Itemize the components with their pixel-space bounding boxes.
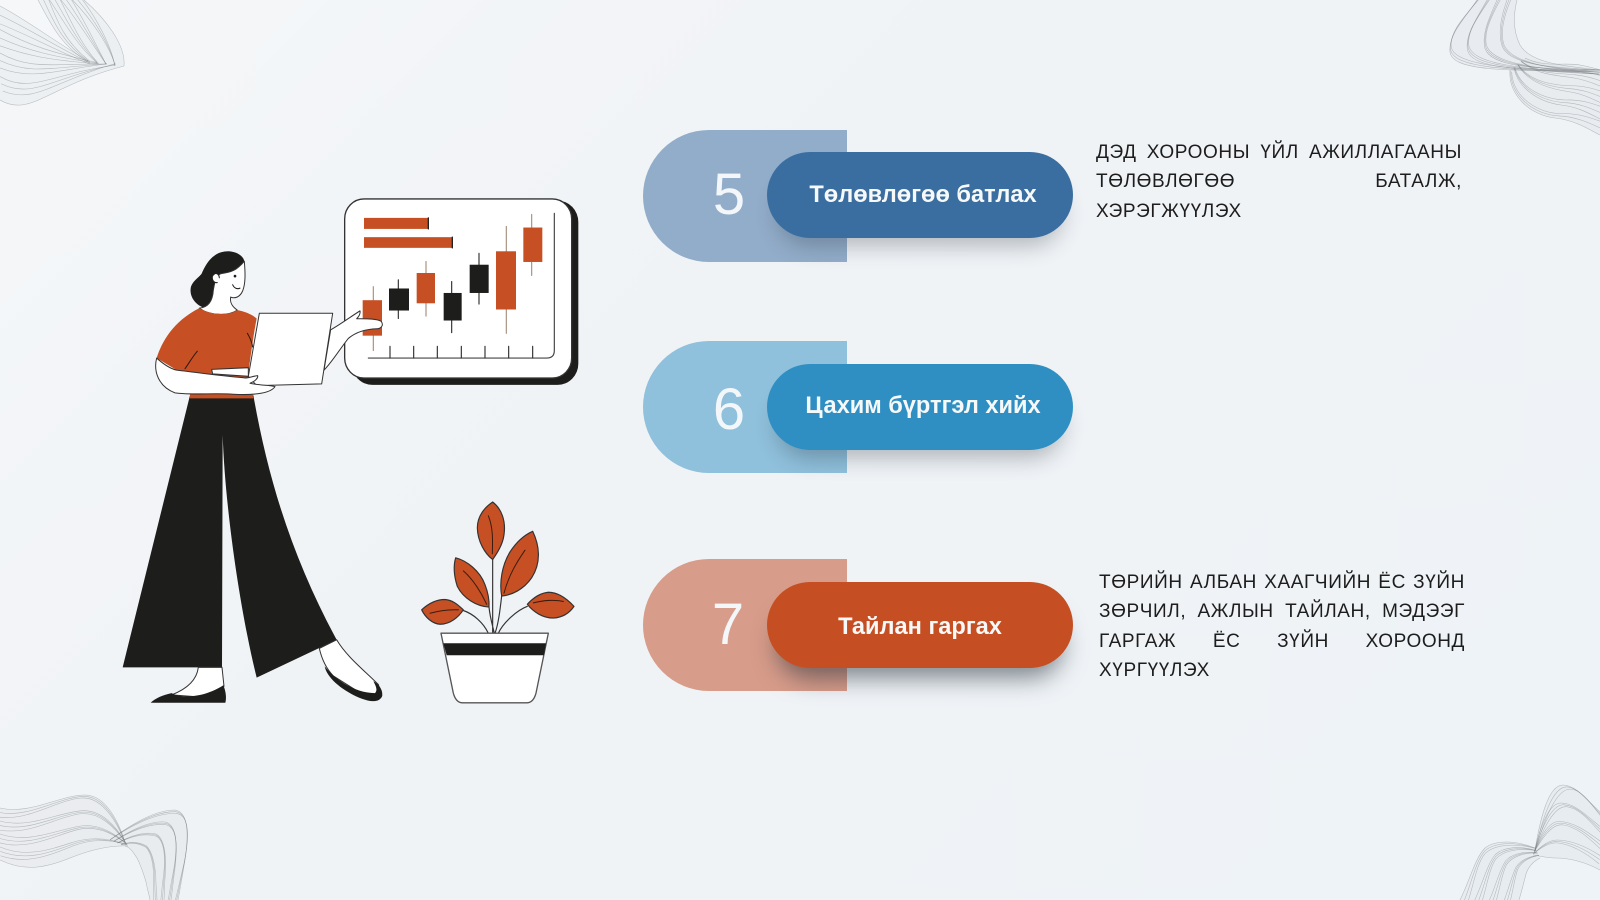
decorative wave: top left [0,0,124,106]
step 6 number tab [643,341,847,473]
step 7 number tab [643,559,847,691]
text: step 7 description: ТӨРИЙН АЛБАН ХААГЧИЙН ЁС ЗҮЙН [1099,572,1465,593]
text: step 7 description: ХҮРГҮҮЛЭХ [1099,660,1210,681]
decorative wave: top right [1450,0,1600,136]
step 5 number: 5 [713,162,745,227]
step 7 label pill: Тайлан гаргах [838,614,1002,640]
step 6 label pill: Цахим бүртгэл хийх [805,393,1041,419]
text: step 7 description: ГАРГАЖ ЁС ЗҮЙН ХОРООНД [1099,631,1465,652]
decorative wave: bottom left [0,794,188,900]
text: step 5 description [1096,140,1462,222]
text: step 7 description [1099,570,1465,681]
icon: woman [123,251,382,703]
step 7 label pill [767,582,1073,668]
text: step 7 description: ЗӨРЧИЛ, АЖЛЫН ТАЙЛАН, МЭДЭЭГ [1099,601,1465,622]
step 6 label pill [767,364,1073,450]
step 5 label pill [767,152,1073,238]
step 7 number: 7 [712,592,744,657]
text: step 5 description: ДЭД ХОРООНЫ ҮЙЛ АЖИЛЛАГААНЫ [1096,142,1462,163]
text: step 5 description: ХЭРЭГЖҮҮЛЭХ [1096,201,1242,222]
panel: step 6 [643,341,1074,473]
step 5 number tab [643,130,847,262]
panel: step 7 [643,559,1078,695]
step 5 label pill: Төлөвлөгөө батлах [809,182,1037,208]
panel: step 5 [643,130,1074,262]
decorative wave: bottom right [1460,784,1600,900]
step 6 number: 6 [713,377,745,442]
icon: chart board [345,199,578,385]
text: step 5 description: ТӨЛӨВЛӨГӨӨ БАТАЛЖ, [1096,171,1462,192]
icon: potted plant [422,502,574,703]
